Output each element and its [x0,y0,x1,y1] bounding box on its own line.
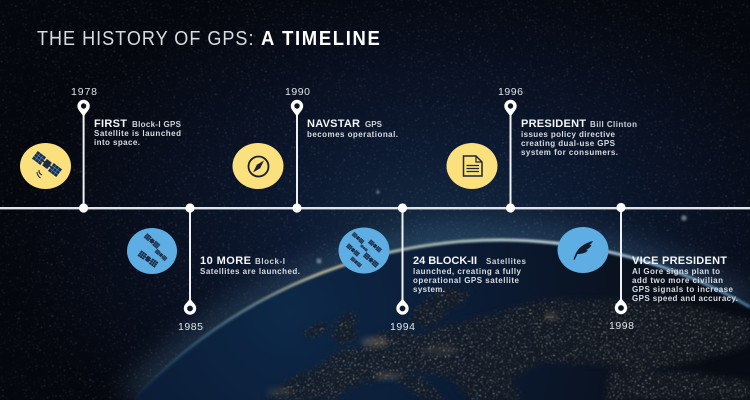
pin and stem 1978 [77,100,90,213]
text: 24 block-II satellites [413,255,527,294]
icon: satellite constellation on blue circle [338,228,390,274]
pin and stem 1998 [615,203,627,314]
icon: satellite on yellow circle [20,143,71,189]
text: vice president gore [632,255,738,303]
text: president clinton [521,118,637,157]
pin and stem 1994 [396,203,409,315]
text: first satellite: into space. [94,138,140,147]
text: 24 block-II satellites: 24 BLOCK-II [413,255,477,267]
text: navstar operational: becomes operational. [307,130,398,139]
text: first satellite: Satellite is launched [94,129,181,138]
bright urban clusters [266,313,558,396]
text: ten more satellites: Block-I [255,257,285,266]
text: vice president gore: VICE PRESIDENT [632,255,727,267]
icon: compass on yellow circle [232,143,284,189]
text: ten more satellites: 10 MORE [200,255,251,267]
text: navstar operational: GPS [365,120,383,129]
icon: document on yellow circle [446,143,498,189]
text: navstar operational: NAVSTAR [307,118,360,130]
atmosphere limb [133,240,750,400]
text: 24 block-II satellites: system. [413,285,445,294]
year label 1990: 1990 [285,86,310,98]
title: A TIMELINE [261,27,380,50]
earth with night lights [0,240,750,400]
text: vice president gore: GPS signals to increase [632,285,734,294]
event: 1978 [20,86,182,213]
icon: two satellites on blue circle [127,228,177,274]
city lights [271,286,750,400]
title: THE HISTORY OF GPS: [37,28,253,50]
event: 1994 [338,203,527,333]
atmosphere glow [133,240,750,400]
land masses [270,286,750,400]
pin and stem 1996 [504,100,517,213]
text: president clinton: creating dual-use GPS [521,139,616,148]
text: president clinton: system for consumers. [521,148,618,157]
event: 1990 [232,86,398,213]
text: ten more satellites [200,255,300,276]
earth disc [133,240,750,400]
text: navstar operational [307,118,398,139]
timeline axis [0,207,750,209]
year label 1994: 1994 [390,321,415,333]
text: first satellite: Block-I GPS [132,120,182,129]
background: distant glowing stars [316,190,687,264]
text: president clinton: PRESIDENT [521,118,586,130]
text: vice president gore: add two more civilian [632,276,723,285]
pin and stem 1990 [291,100,303,213]
year label 1985: 1985 [178,321,203,333]
year label 1996: 1996 [498,86,523,98]
pin and stem 1985 [184,203,196,315]
year label 1978: 1978 [71,86,97,98]
text: president clinton: Bill Clinton [590,120,637,129]
title [37,27,380,50]
text: 24 block-II satellites: launched, creating a fully [413,267,522,276]
text: vice president gore: Al Gore signs plan to [632,267,720,276]
text: first satellite: FIRST [94,118,127,130]
event: 1996 [446,86,637,213]
year label 1998: 1998 [609,320,634,332]
icon: quill feather on blue circle [558,227,608,273]
event: 1998 [558,203,738,332]
text: president clinton: issues policy directive [521,130,616,139]
text: vice president gore: GPS speed and accuracy. [632,294,738,303]
text: 24 block-II satellites: Satellites [486,257,527,266]
text: 24 block-II satellites: operational GPS satellite [413,276,520,285]
event: 1985 [127,203,300,333]
text: ten more satellites: Satellites are launched. [200,267,300,276]
text: first satellite [94,118,182,147]
